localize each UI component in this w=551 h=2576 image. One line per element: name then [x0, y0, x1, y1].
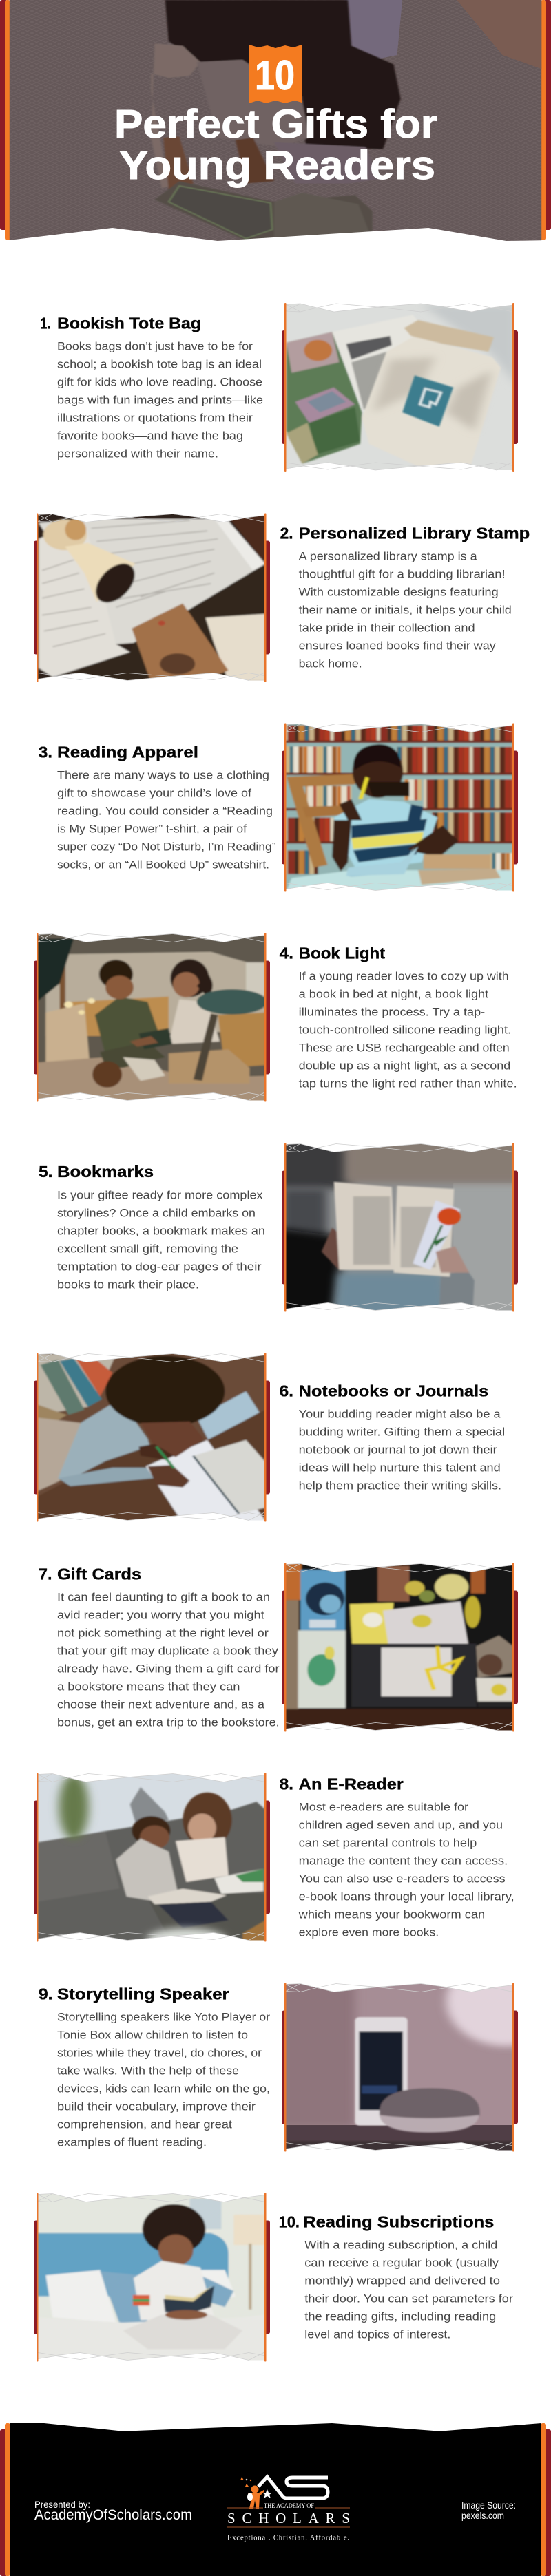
- body text 6: help them practice their writing skills.: [299, 1480, 501, 1492]
- logo: The Academy of Scholars: [227, 2477, 350, 2542]
- body text 6: Your budding reader might also be a: [299, 1408, 501, 1421]
- panel: 3 Reading Apparel: [39, 721, 520, 895]
- image source: [461, 2500, 516, 2521]
- logo wordmark: THE ACADEMY OF: [264, 2503, 314, 2510]
- body text 7: choose their next adventure and, as a: [57, 1699, 265, 1711]
- heading 10: Reading Subscriptions: [303, 2213, 494, 2230]
- body text 4: a book in bed at night, a book light: [299, 989, 489, 1001]
- presented by: AcademyOfScholars.com: [34, 2506, 192, 2523]
- body text 9: Storytelling speakers like Yoto Player or: [57, 2012, 271, 2024]
- heading 5: 5.: [39, 1163, 52, 1181]
- body text 4: touch-controlled silicone reading light.: [299, 1024, 511, 1037]
- image source: pexels.com: [461, 2511, 504, 2521]
- heading 7: 7.: [39, 1565, 52, 1583]
- body text 1: school; a bookish tote bag is an ideal: [57, 358, 262, 370]
- logo rule lines: [227, 2508, 350, 2527]
- body text 7: bonus, get an extra trip to the bookstore.: [57, 1717, 280, 1729]
- logo white star: [262, 2489, 272, 2498]
- body text 4: [299, 971, 517, 1090]
- body text 9: devices, kids can learn while on the go,: [57, 2083, 270, 2095]
- heading 8: An E-Reader: [299, 1775, 404, 1793]
- panel: 4 Book Light: [34, 931, 517, 1107]
- heading 5: Bookmarks: [57, 1163, 154, 1181]
- body text 9: [57, 2012, 271, 2149]
- badge: number 10: 10: [255, 52, 295, 98]
- panel: 10 Reading Subscriptions: [34, 2190, 513, 2365]
- body text 5: books to mark their place.: [57, 1279, 199, 1291]
- body text 5: temptation to dog-ear pages of their: [57, 1261, 262, 1274]
- body text 5: Is your giftee ready for more complex: [57, 1190, 263, 1202]
- heading 9: 9.: [39, 1985, 52, 2003]
- body text 6: budding writer. Gifting them a special: [299, 1426, 505, 1439]
- presented by: [34, 2500, 192, 2523]
- heading 9: Storytelling Speaker: [57, 1985, 229, 2003]
- body text 9: comprehension, and hear great: [57, 2119, 232, 2131]
- body text 9: take walks. With the help of these: [57, 2065, 239, 2078]
- body text 1: personalized with their name.: [57, 447, 218, 460]
- body text 9: examples of fluent reading.: [57, 2137, 207, 2149]
- header side ribbons: [0, 0, 551, 240]
- body text 6: ideas will help nurture this talent and: [299, 1462, 501, 1475]
- body text 2: back home.: [299, 658, 362, 671]
- body text 5: excellent small gift, removing the: [57, 1243, 238, 1256]
- body text 4: If a young reader loves to cozy up with: [299, 971, 509, 983]
- body text 1: gift for kids who love reading. Choose: [57, 376, 262, 388]
- header banner: [0, 0, 551, 248]
- body text 8: You can also use e-readers to access: [299, 1872, 506, 1885]
- body text 10: can receive a regular book (usually: [304, 2257, 499, 2269]
- body text 1: illustrations or quotations from their: [57, 412, 253, 424]
- body text 9: stories while they travel, do chores, or: [57, 2047, 262, 2060]
- photo: hands holding book with bookmark: [282, 1143, 518, 1312]
- photo: two children reading on a sofa: [34, 1770, 271, 1949]
- footer black band: [10, 2423, 541, 2576]
- body text 8: can set parental controls to help: [299, 1837, 477, 1849]
- photo: children reading in a blanket fort: [34, 931, 271, 1107]
- body text 2: ensures loaned books find their way: [299, 640, 497, 653]
- body text 8: Most e-readers are suitable for: [299, 1801, 469, 1813]
- heading 6: Notebooks or Journals: [299, 1382, 488, 1400]
- body text 4: double up as a night light, as a second: [299, 1060, 510, 1073]
- heading 2: 2.: [280, 525, 293, 542]
- body text 6: [299, 1408, 505, 1492]
- heading 10: 10.: [279, 2213, 300, 2230]
- body text 8: explore even more books.: [299, 1926, 439, 1939]
- heading 4: Book Light: [299, 944, 385, 962]
- body text 3: super cozy “Do Not Disturb, I’m Reading”: [57, 841, 276, 854]
- body text 10: monthly) wrapped and delivered to: [304, 2274, 500, 2287]
- body text 5: storylines? Once a child embarks on: [57, 1207, 256, 1220]
- body text 10: With a reading subscription, a child: [304, 2239, 497, 2251]
- presented by: Presented by:: [34, 2500, 90, 2510]
- body text 4: These are USB rechargeable and often: [299, 1042, 510, 1055]
- body text 7: not pick something at the right level or: [57, 1627, 269, 1640]
- body text 5: [57, 1190, 265, 1291]
- panel: 5 Bookmarks: [39, 1143, 518, 1312]
- body text 10: their door. You can set parameters for: [304, 2292, 513, 2305]
- body text 7: avid reader; you worry that you might: [57, 1609, 264, 1622]
- body text 2: With customizable designs featuring: [299, 587, 499, 599]
- heading 7: Gift Cards: [57, 1565, 141, 1583]
- body text 8: manage the content they can access.: [299, 1855, 508, 1867]
- photo: smartphone and smart speaker: [282, 1983, 518, 2152]
- heading 1: Bookish Tote Bag: [57, 314, 201, 332]
- body text 3: gift to showcase your child’s love of: [57, 788, 251, 800]
- header torn bottom edge: [0, 228, 551, 248]
- photo: girl reading cross-legged on a bed: [34, 2190, 271, 2365]
- panel: 8 An E-Reader: [34, 1770, 514, 1949]
- body text 2: A personalized library stamp is a: [299, 551, 478, 563]
- body text 7: It can feel daunting to gift a book to an: [57, 1592, 270, 1604]
- logo wordmark: SCHOLARS: [227, 2510, 350, 2526]
- body text 2: [299, 551, 512, 671]
- body text 1: Books bags don’t just have to be for: [57, 340, 253, 352]
- heading 3: 3.: [39, 743, 52, 761]
- panel: 2 Personalized Library Stamp: [34, 510, 530, 684]
- panel: 1 Bookish Tote Bag: [41, 302, 520, 476]
- body text 8: e-book loans through your local library,: [299, 1890, 514, 1903]
- heading 8: 8.: [280, 1775, 293, 1793]
- logo child figure: [240, 2477, 264, 2509]
- body text 8: children aged seven and up, and you: [299, 1819, 503, 1831]
- body text 2: take pride in their collection and: [299, 622, 475, 635]
- body text 6: notebook or journal to jot down their: [299, 1444, 497, 1457]
- logo mark AS: [258, 2477, 328, 2498]
- footer side ribbons: [0, 2423, 551, 2576]
- body text 10: the reading gifts, including reading: [304, 2310, 496, 2323]
- body text 1: bags with fun images and prints—like: [57, 394, 263, 406]
- heading 2: Personalized Library Stamp: [299, 525, 530, 542]
- heading 3: Reading Apparel: [57, 743, 198, 761]
- body text 4: illuminates the process. Try a tap-: [299, 1006, 485, 1019]
- title: [114, 102, 437, 188]
- photo: boy reading at a bookshelf: [281, 721, 520, 895]
- body text 10: level and topics of interest.: [304, 2328, 450, 2341]
- body text 4: tap turns the light red rather than white.: [299, 1078, 517, 1090]
- footer: [0, 2423, 551, 2576]
- title: Young Readers: [119, 143, 435, 188]
- badge: number 10: [249, 45, 302, 103]
- title: Perfect Gifts for: [114, 102, 437, 147]
- body text 3: socks, or an “All Booked Up” sweatshirt.: [57, 859, 269, 872]
- panel: 7 Gift Cards: [39, 1561, 520, 1735]
- header photo: girl reading on a quilt: [10, 0, 541, 241]
- body text 10: [304, 2239, 513, 2341]
- body text 2: their name or initials, it helps your child: [299, 604, 512, 617]
- panel: 6 Notebooks or Journals: [34, 1351, 505, 1524]
- body text 7: already have. Giving them a gift card for: [57, 1663, 280, 1676]
- body text 3: There are many ways to use a clothing: [57, 770, 269, 782]
- body text 9: Tonie Box allow children to listen to: [57, 2029, 248, 2042]
- body text 7: a bookstore means that they can: [57, 1681, 240, 1693]
- body text 1: favorite books—and have the bag: [57, 430, 243, 442]
- photo: tote bag and magazine: [281, 302, 520, 476]
- heading 6: 6.: [280, 1382, 293, 1400]
- body text 3: reading. You could consider a “Reading: [57, 805, 273, 818]
- body text 8: which means your bookworm can: [298, 1908, 485, 1921]
- panel: 9 Storytelling Speaker: [39, 1983, 518, 2152]
- logo wordmark: Exceptional. Christian. Affordable.: [227, 2535, 349, 2542]
- body text 3: is My Super Power” t-shirt, a pair of: [57, 823, 247, 836]
- body text 2: thoughtful gift for a budding librarian!: [299, 569, 506, 581]
- heading 4: 4.: [280, 944, 293, 962]
- image source: Image Source:: [461, 2500, 516, 2511]
- body text 7: [57, 1592, 280, 1729]
- body text 9: build their vocabulary, improve their: [57, 2101, 256, 2113]
- body text 3: [57, 770, 276, 872]
- body text 8: [298, 1801, 514, 1939]
- photo: bookstore gift card display: [281, 1561, 520, 1735]
- photo: wooden stamp on open book: [34, 510, 271, 684]
- body text 1: [57, 340, 263, 460]
- logo wordmark: [227, 2503, 350, 2542]
- heading 1: 1.: [41, 314, 50, 332]
- body text 5: chapter books, a bookmark makes an: [57, 1225, 265, 1238]
- photo: girl writing in a notebook: [34, 1351, 271, 1524]
- body text 7: that your gift may duplicate a book they: [57, 1645, 279, 1658]
